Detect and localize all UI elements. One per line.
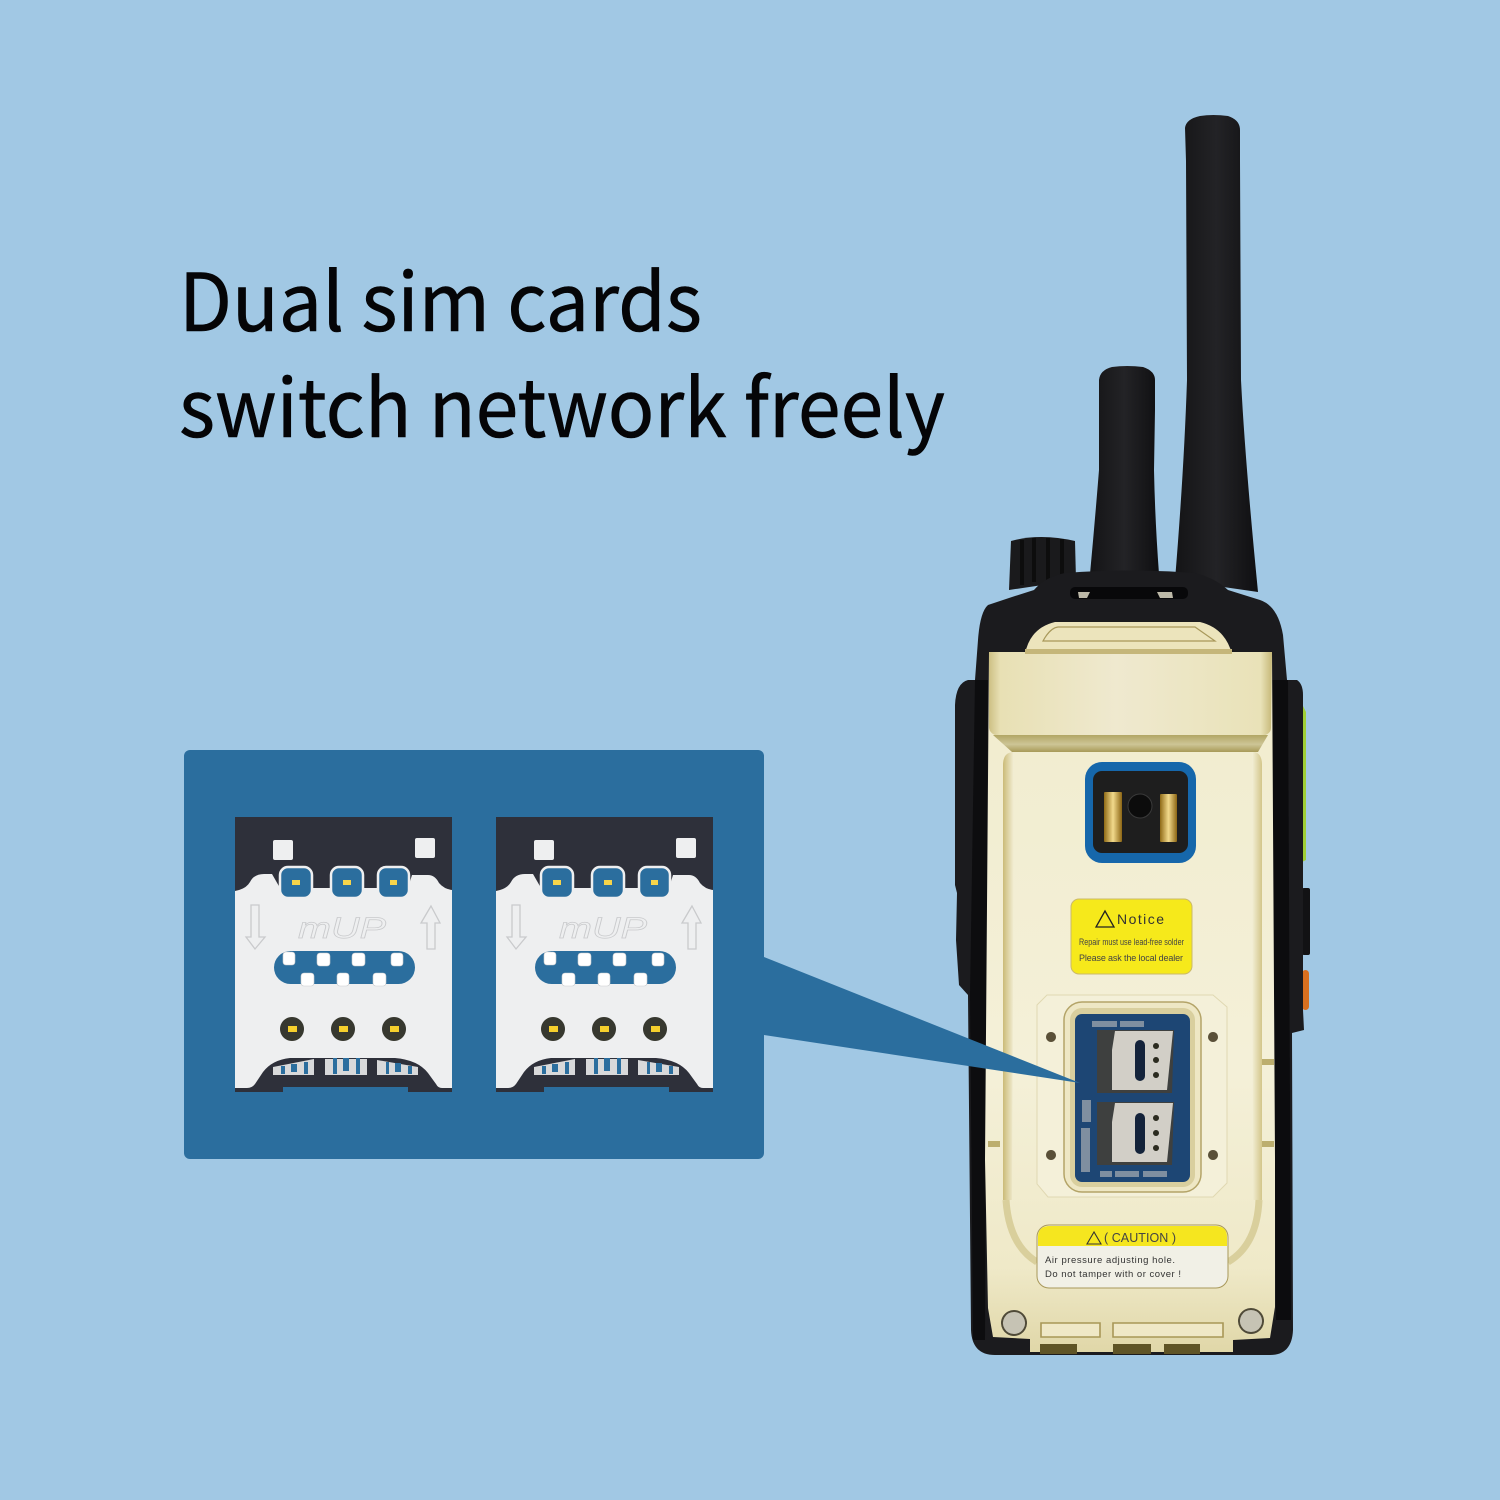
grips and side buttons bbox=[1302, 704, 1310, 1010]
right inner black strip bbox=[1272, 680, 1291, 1320]
yellow band bbox=[1038, 1226, 1227, 1246]
bottom combs bbox=[273, 1059, 418, 1075]
frame inner ring bbox=[1070, 1008, 1195, 1187]
bottom sim slot bbox=[1135, 1113, 1145, 1154]
top white squares bbox=[534, 838, 696, 860]
charging port black bbox=[1093, 771, 1188, 853]
sim slot diagram left bbox=[235, 817, 452, 1092]
knob ridges bbox=[1022, 538, 1062, 585]
warning triangle bbox=[1096, 911, 1114, 927]
callout pointer bbox=[764, 957, 1080, 1083]
top contacts bbox=[541, 867, 670, 898]
pill squares bbox=[283, 952, 403, 986]
square left bbox=[273, 840, 293, 860]
heading: Dual sim cards bbox=[179, 239, 702, 355]
round contacts bbox=[280, 1017, 406, 1041]
orange button bbox=[1302, 970, 1309, 1010]
comb teeth bbox=[281, 1058, 412, 1074]
charging port blue gasket bbox=[1085, 762, 1196, 863]
edge notches bbox=[988, 1059, 1274, 1147]
right crease bbox=[1252, 752, 1262, 1200]
notice sticker bbox=[1071, 899, 1192, 974]
square row 1 b bbox=[578, 953, 591, 966]
long antenna bbox=[1175, 115, 1258, 592]
sticker base bbox=[1071, 899, 1192, 974]
white slot body bbox=[235, 874, 452, 1088]
contact 1 bbox=[280, 867, 312, 898]
mounting plate bbox=[1037, 995, 1227, 1197]
MUP logo: mUP bbox=[559, 912, 647, 945]
contact pill bbox=[274, 951, 415, 984]
up arrow bbox=[682, 906, 701, 949]
square row 1 a bbox=[283, 952, 295, 965]
caution sticker bbox=[1037, 1225, 1228, 1288]
down arrow bbox=[246, 905, 265, 949]
square row 2 c bbox=[634, 973, 647, 986]
square row 1 d bbox=[652, 953, 664, 966]
round contact pins bbox=[549, 1026, 660, 1032]
top vent bbox=[1070, 587, 1188, 599]
notice title: Notice bbox=[1117, 911, 1164, 927]
square right bbox=[676, 838, 696, 858]
right contact bbox=[1160, 794, 1177, 842]
notice line 1: Repair must use lead-free solder bbox=[1079, 937, 1184, 947]
cap underside shadow bbox=[993, 735, 1268, 752]
square left bbox=[534, 840, 554, 860]
round contact pins bbox=[288, 1026, 399, 1032]
latch groove bbox=[1043, 627, 1215, 641]
sim compartment bbox=[1037, 995, 1227, 1197]
bottom tabs bbox=[1040, 1344, 1200, 1354]
left crease bbox=[1003, 752, 1014, 1200]
contact 1 bbox=[541, 867, 573, 898]
top sim slot bbox=[1135, 1040, 1145, 1081]
latch base line bbox=[1025, 649, 1232, 654]
square row 2 b bbox=[598, 973, 610, 986]
vent highlights bbox=[1078, 592, 1173, 598]
round contacts bbox=[541, 1017, 667, 1041]
green side strip bbox=[1302, 704, 1306, 862]
square row 1 d bbox=[391, 953, 403, 966]
lower left curve bbox=[1006, 1200, 1037, 1262]
contact 3 bbox=[639, 867, 670, 898]
black side button bbox=[1302, 888, 1310, 955]
square row 2 c bbox=[373, 973, 386, 986]
contact pins bbox=[553, 880, 658, 885]
sim card panel bbox=[184, 750, 764, 1159]
inner black strip bbox=[970, 680, 988, 1340]
heading line 2: switch network freely bbox=[179, 345, 945, 461]
walkie-talkie radio bbox=[955, 115, 1310, 1355]
square row 1 c bbox=[613, 953, 626, 966]
bottom slots bbox=[1041, 1323, 1223, 1337]
square row 2 a bbox=[562, 973, 575, 986]
square row 1 b bbox=[317, 953, 330, 966]
bottom sim holder bbox=[1097, 1102, 1174, 1165]
short antenna bbox=[1090, 366, 1159, 574]
contact 3 bbox=[378, 867, 409, 898]
down arrow bbox=[507, 905, 526, 949]
plate screws bbox=[1046, 1032, 1218, 1160]
contact 2 bbox=[592, 867, 624, 898]
inner frame bbox=[1064, 1002, 1201, 1192]
bottom sim contacts bbox=[1153, 1115, 1159, 1151]
caution line 1: Air pressure adjusting hole. bbox=[1045, 1255, 1175, 1266]
belt clip latch bbox=[1025, 622, 1232, 654]
dark slot base bbox=[496, 817, 713, 1092]
warning triangle bbox=[1087, 1232, 1101, 1244]
square row 1 c bbox=[352, 953, 365, 966]
bottom screws bbox=[1002, 1309, 1263, 1335]
top sim contacts bbox=[1153, 1043, 1159, 1078]
port screw bbox=[1128, 794, 1152, 818]
top sim cover bbox=[1112, 1031, 1173, 1090]
pill squares bbox=[544, 952, 664, 986]
dark slot base bbox=[235, 817, 452, 1092]
square right bbox=[415, 838, 435, 858]
left contact bbox=[1104, 792, 1122, 842]
battery gold plate bbox=[985, 652, 1275, 1352]
square row 1 a bbox=[544, 952, 556, 965]
bottom sim cover bbox=[1112, 1103, 1173, 1162]
caution title: ( CAUTION ) bbox=[1104, 1231, 1176, 1245]
lower right curve bbox=[1228, 1200, 1259, 1262]
up arrow bbox=[421, 906, 440, 949]
comb teeth bbox=[542, 1058, 673, 1074]
bottom combs bbox=[534, 1059, 679, 1075]
pcb bbox=[1075, 1014, 1190, 1182]
square row 2 a bbox=[301, 973, 314, 986]
notice line 2: Please ask the local dealer bbox=[1079, 953, 1183, 963]
sim slot diagram right bbox=[496, 817, 713, 1092]
white slot body bbox=[496, 874, 713, 1088]
contact pins bbox=[292, 880, 397, 885]
top white squares bbox=[273, 838, 435, 860]
sticker base bbox=[1037, 1225, 1228, 1288]
square row 2 b bbox=[337, 973, 349, 986]
pcb silkscreen bbox=[1081, 1021, 1167, 1177]
top contacts bbox=[280, 867, 409, 898]
MUP logo: mUP bbox=[298, 912, 386, 945]
upper cap bbox=[989, 652, 1272, 736]
contact pill bbox=[535, 951, 676, 984]
top sim holder bbox=[1097, 1030, 1174, 1093]
contact 2 bbox=[331, 867, 363, 898]
caution line 2: Do not tamper with or cover ! bbox=[1045, 1269, 1181, 1280]
body black shell bbox=[955, 570, 1304, 1355]
volume knob bbox=[1009, 537, 1076, 590]
